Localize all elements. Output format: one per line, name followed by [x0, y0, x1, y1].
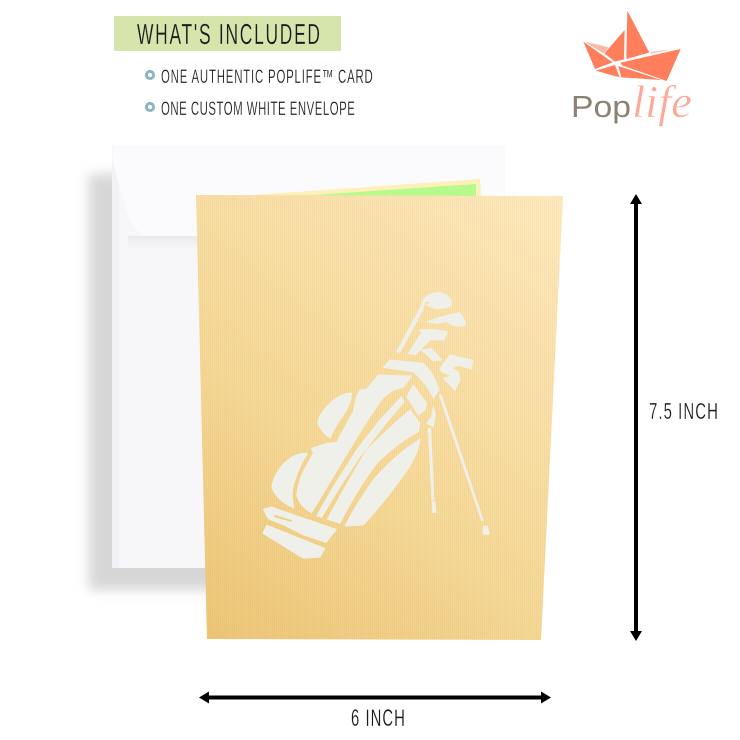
envelope shadow	[89, 174, 283, 590]
strap strip	[317, 397, 404, 517]
width dimension arrow	[199, 692, 551, 704]
logo: poplife	[571, 11, 692, 127]
item: authentic card: ONE AUTHENTIC POPLIFE™ CARD	[161, 67, 373, 88]
height dimension arrow	[630, 194, 642, 641]
lower pocket	[272, 453, 307, 508]
wordmark: life: life	[632, 76, 692, 127]
stand leg short	[428, 428, 434, 500]
main panel	[297, 375, 412, 513]
club one	[397, 293, 452, 352]
stand leg long	[439, 395, 483, 521]
club five	[440, 355, 473, 390]
club two	[427, 313, 465, 326]
list of included items	[146, 67, 373, 120]
upper pocket	[318, 393, 352, 438]
club four	[422, 348, 442, 361]
golf bag cut-out	[263, 293, 489, 558]
envelope body	[112, 146, 505, 568]
envelope flap	[113, 147, 505, 236]
icon: origami boat	[583, 11, 681, 81]
heading: what's included: WHAT'S INCLUDED	[137, 19, 320, 51]
club three	[408, 329, 447, 355]
wordmark: Pop: Pop	[571, 89, 631, 124]
card front	[196, 195, 563, 640]
lower panel	[345, 439, 420, 526]
bag collar	[383, 360, 439, 398]
side panel	[407, 385, 427, 415]
wide panel	[327, 410, 420, 523]
label: 7.5 inch: 7.5 INCH	[649, 399, 718, 425]
inner card peeking out	[240, 179, 481, 196]
label: 6 inch: 6 INCH	[351, 706, 405, 732]
envelope	[89, 146, 505, 590]
item: white envelope: ONE CUSTOM WHITE ENVELOPE	[161, 99, 355, 120]
bag base	[263, 507, 337, 558]
